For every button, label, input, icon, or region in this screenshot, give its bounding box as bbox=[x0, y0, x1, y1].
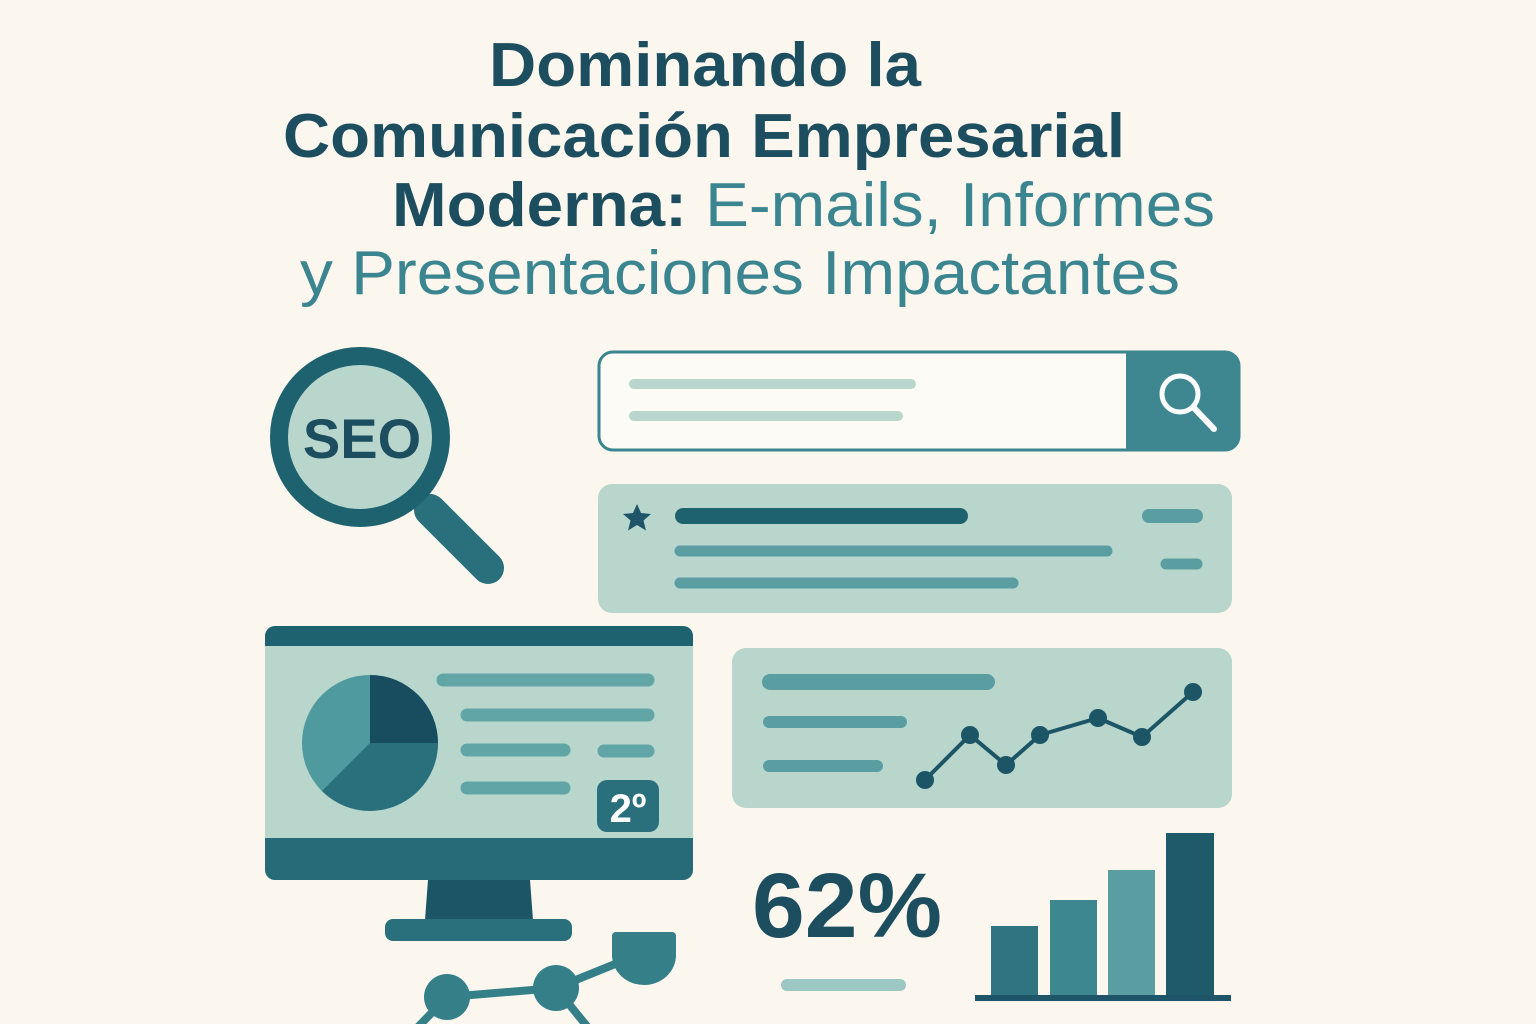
bar chart bbox=[975, 833, 1231, 1001]
title: Moderna: E-mails, Informes bbox=[392, 171, 1215, 240]
search bar bbox=[599, 351, 1240, 451]
pie chart bbox=[302, 675, 438, 811]
line chart card bbox=[732, 648, 1232, 808]
icon: SEO magnifier: SEO bbox=[303, 407, 421, 470]
search result card bbox=[598, 484, 1232, 613]
title: y Presentaciones Impactantes bbox=[300, 239, 1180, 308]
stat 62%: 62% bbox=[752, 855, 942, 957]
badge 2º bbox=[597, 780, 659, 832]
icon: SEO magnifier bbox=[279, 356, 488, 568]
network nodes bbox=[415, 932, 676, 1024]
badge 2º: 2º bbox=[610, 787, 646, 831]
title: Dominando la bbox=[489, 31, 922, 100]
title bbox=[283, 31, 1215, 308]
title: Comunicación Empresarial bbox=[283, 102, 1125, 171]
icon: search bbox=[1162, 376, 1214, 429]
monitor bbox=[265, 626, 693, 941]
